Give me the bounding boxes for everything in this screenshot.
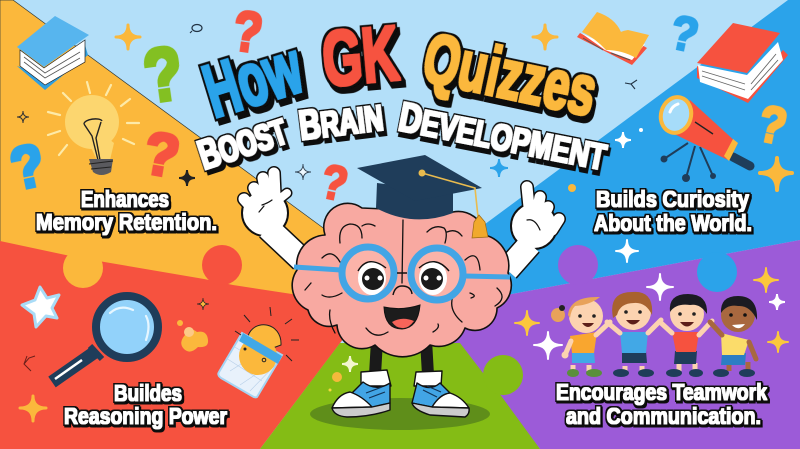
icon: red question mark left: ?	[139, 119, 184, 191]
icon: sparkles on purple panel	[515, 268, 788, 359]
label: memory retention: Memory Retention.	[36, 209, 217, 235]
icon: red question mark top: ?	[229, 0, 267, 66]
panel: foundation (green)	[260, 343, 540, 449]
title word: Quizzes: Quizzes	[417, 18, 603, 131]
icon: red book	[697, 23, 788, 103]
title word: How: How	[194, 25, 312, 134]
subtitle word: Development: DEVELOPMENT	[395, 94, 610, 179]
right shoe	[412, 371, 469, 417]
eyes	[358, 261, 449, 295]
shoe shadow	[310, 398, 490, 430]
subtitle word: Brain: BRAIN	[297, 93, 386, 149]
icon: blue question mark right: ?	[665, 5, 703, 63]
panel: curiosity (blue)	[450, 0, 800, 295]
icon: white star	[22, 287, 59, 327]
icon: small red question mark: ?	[316, 154, 353, 212]
icon: yellow question mark right: ?	[753, 95, 792, 156]
subtitle word: Boost: BOOST	[193, 107, 293, 179]
label: curiosity	[594, 186, 752, 236]
brain body	[292, 203, 511, 357]
mouth	[384, 305, 420, 329]
label: curiosity: Builds Curiosity	[596, 186, 749, 212]
label: reasoning: Reasoning Power	[64, 403, 227, 429]
child 3	[660, 294, 712, 377]
right arm and hand	[507, 187, 559, 270]
label: memory retention	[36, 186, 217, 235]
icon: open book	[577, 12, 649, 65]
legs	[375, 340, 428, 375]
icon: blue book stack	[17, 16, 89, 90]
label: reasoning: Buildes	[114, 380, 182, 406]
icon: sparkles on the sky and yellow panels	[17, 24, 637, 186]
icon: blue question mark left: ?	[5, 131, 51, 204]
label: reasoning	[64, 380, 227, 429]
nose	[393, 273, 412, 295]
icon: orange blob and accents	[20, 298, 209, 421]
icon: calendar lock	[218, 307, 299, 397]
character: brain mascot	[242, 155, 559, 417]
panel: reasoning (red)	[0, 241, 350, 449]
child 1	[551, 297, 610, 377]
label: teamwork: and Communication.	[566, 403, 761, 429]
child 2	[607, 292, 661, 377]
panel: teamwork (purple)	[450, 240, 800, 449]
label: memory retention: Enhances	[81, 186, 169, 212]
title word: GK: GK	[319, 9, 402, 103]
graduation cap	[357, 155, 488, 238]
icon: telescope	[657, 94, 750, 182]
title: How GK Quizzes	[194, 9, 603, 134]
left shoe	[332, 370, 391, 417]
subtitle: Boost Brain Development	[193, 93, 610, 179]
child 4	[710, 296, 757, 377]
brain folds	[305, 220, 502, 335]
icon: green question mark: ?	[138, 30, 188, 119]
glasses	[294, 247, 510, 300]
panel: memory (yellow)	[0, 0, 345, 310]
left arm and hand	[242, 173, 302, 260]
icon: sparkles on blue panel	[568, 128, 792, 262]
label: teamwork: Encourages Teamwork	[556, 379, 767, 405]
label: teamwork	[556, 379, 767, 429]
label: curiosity: About the World.	[594, 210, 752, 236]
icon: light bulb	[48, 82, 139, 175]
icon: magnifying glass	[52, 296, 158, 382]
icon: sparkles on green	[328, 356, 358, 392]
illustration: four children holding hands	[551, 292, 757, 377]
